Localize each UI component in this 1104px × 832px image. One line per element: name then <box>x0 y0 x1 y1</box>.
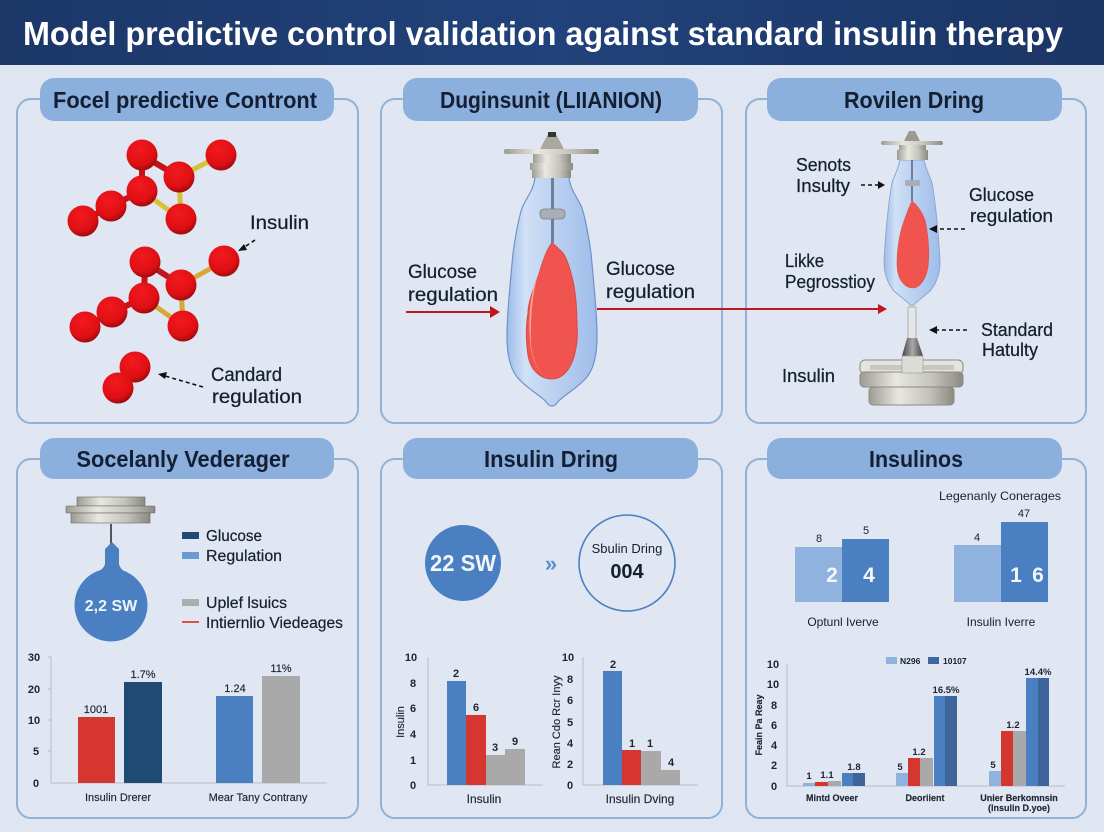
grouped bar chart: Feain Pa Reay <box>754 694 764 756</box>
bar chart: insulin dving: 4 <box>567 738 574 750</box>
big value circle <box>425 525 501 601</box>
bar chart: insulin dreyer: 1.24 <box>224 683 246 695</box>
stacked comparison: optunl iverve: 5 <box>863 525 869 537</box>
icon: middle molecule <box>70 246 240 342</box>
grouped bar chart: (Insulin D.yoe) <box>988 803 1050 813</box>
grouped bar chart: Unier Berkomnsin <box>980 793 1058 803</box>
label: regulation left: regulation <box>408 285 498 306</box>
panel heading <box>403 438 698 479</box>
legend <box>182 528 343 632</box>
label: standard: Standard <box>981 320 1053 340</box>
icon: blue dose drop <box>74 542 148 642</box>
label: glucose: Glucose <box>969 185 1034 205</box>
bar chart: insulin dving: 1 <box>629 738 635 750</box>
bar chart: insulin dreyer: 1001 <box>84 704 108 716</box>
arrow: glucose <box>929 225 965 233</box>
bar chart: insulin: 9 <box>512 736 518 748</box>
panel: flask <box>381 78 722 423</box>
arrow: long flow <box>597 304 887 314</box>
grouped bar chart: 2 <box>771 760 777 772</box>
bar chart: insulin dreyer <box>28 652 327 804</box>
bar chart: insulin dving: 4 <box>668 757 675 769</box>
bar chart: insulin: 0 <box>410 780 416 792</box>
stacked comparison: optunl iverve: 2 <box>826 564 838 587</box>
stacked comparison: optunl iverve <box>795 525 889 629</box>
panel heading <box>40 438 334 479</box>
stacked comparison: optunl iverve: Optunl Iverve <box>807 615 879 629</box>
legend: Uplef lsuics <box>206 595 287 612</box>
stacked comparison: insulin iverre: 1 <box>1010 564 1022 587</box>
bar chart: insulin dving: 2 <box>610 659 616 671</box>
header banner <box>0 0 1104 65</box>
bar chart: insulin dreyer: 5 <box>33 746 39 758</box>
bar chart: insulin: 6 <box>410 703 416 715</box>
panel heading: Insulin Dring <box>484 446 618 472</box>
chart note: Legenanly Conerages <box>939 489 1061 503</box>
grouped bar chart: 5 <box>897 762 903 773</box>
stacked comparison: insulin iverre: 6 <box>1032 564 1044 587</box>
label: insulin: Insulin <box>782 366 835 386</box>
bar chart: insulin dreyer: 10 <box>28 715 40 727</box>
label: pegrosstioy: Pegrosstioy <box>785 272 875 292</box>
grouped bar chart: 5 <box>990 760 996 771</box>
bar chart: insulin dving: 1 <box>647 738 653 750</box>
legend: Glucose <box>206 528 262 545</box>
grouped bar chart: 16.5% <box>933 685 960 696</box>
stacked comparison: insulin iverre <box>954 508 1048 629</box>
chart legend <box>886 656 967 666</box>
bar chart: insulin: 4 <box>410 729 417 741</box>
bar chart: insulin: 2 <box>453 668 459 680</box>
label: regulation: regulation <box>970 206 1053 226</box>
arrow: standard <box>929 326 967 334</box>
grouped bar chart: 8 <box>771 700 777 712</box>
grouped bar chart: 4 <box>771 740 778 752</box>
arrow: senots <box>861 181 885 189</box>
bar chart: insulin dreyer: 20 <box>28 684 40 696</box>
outlined value circle <box>579 515 675 611</box>
bar chart: insulin: Insulin <box>467 792 501 806</box>
grouped bar chart: 1.2 <box>1006 720 1020 731</box>
bar chart: insulin dving <box>551 652 698 806</box>
stacked comparison: insulin iverre: 4 <box>974 532 980 544</box>
bar chart: insulin dreyer: 0 <box>33 778 39 790</box>
grouped bar chart: 1.2 <box>912 747 926 758</box>
bar chart: insulin: Insulin <box>395 706 407 738</box>
label: glucose regulation left: Glucose <box>408 262 477 283</box>
big value circle: 22 SW <box>430 550 496 576</box>
grouped bar chart: Mintd Oveer <box>806 793 858 803</box>
grouped bar chart: 0 <box>771 781 777 793</box>
stacked comparison: optunl iverve: 8 <box>816 533 822 545</box>
chart legend: 10107 <box>943 656 967 666</box>
panel: insulin dring <box>381 438 722 818</box>
bar chart: insulin dving: 6 <box>567 695 573 707</box>
panel heading: Socelanly Vederager <box>76 446 290 472</box>
grouped bar chart: 10 <box>767 679 779 691</box>
label: hatulty: Hatulty <box>982 340 1038 360</box>
bar chart: insulin dving: 8 <box>567 674 573 686</box>
icon: flask with stand <box>860 131 963 405</box>
label: regulation: regulation <box>212 387 302 408</box>
panel heading <box>40 78 334 121</box>
panel: dose and bars <box>17 438 358 818</box>
panel heading <box>767 438 1062 479</box>
icon: upper molecule <box>68 140 236 236</box>
legend: Intiernlio Viedeages <box>206 615 343 632</box>
bar chart: insulin dreyer: 1.7% <box>130 669 156 681</box>
bar chart: insulin dving: Rean Cdo Rcr Inyy <box>551 675 563 768</box>
bar chart: insulin: 8 <box>410 678 416 690</box>
bar chart: insulin dving: Insulin Dving <box>606 792 674 806</box>
panel heading <box>403 78 698 121</box>
chevron: » <box>545 551 557 576</box>
title: Model predictive control validation against standard insulin therapy <box>23 15 1064 52</box>
panel heading: Focel predictive Contront <box>53 87 317 113</box>
bar chart: insulin <box>395 652 543 806</box>
bar chart: insulin dving: 5 <box>567 717 573 729</box>
panel: device <box>597 78 1086 423</box>
bar chart: insulin dreyer: Insulin Drerer <box>85 792 151 804</box>
grouped bar chart: 1.1 <box>820 770 834 781</box>
arrow: candard <box>158 372 203 387</box>
grouped bar chart: 10 <box>767 659 779 671</box>
grouped bar chart <box>754 656 1065 813</box>
grouped bar chart: 1 <box>806 771 812 782</box>
stacked comparison: insulin iverre: 47 <box>1018 508 1030 520</box>
label: insulin: Insulin <box>250 213 309 234</box>
icon: pump head <box>66 497 155 544</box>
label: glucose regulation right: Glucose <box>606 259 675 280</box>
bar chart: insulin dreyer: 30 <box>28 652 40 664</box>
bar chart: insulin: 3 <box>492 742 498 754</box>
bar chart: insulin dving: 2 <box>567 759 573 771</box>
arrow: inflow <box>406 306 500 318</box>
label: senots: Senots <box>796 155 851 175</box>
bar chart: insulin: 10 <box>405 652 417 664</box>
label: candard regulation: Candard <box>211 365 282 386</box>
legend: Regulation <box>206 548 282 565</box>
icon: small molecule <box>102 352 150 404</box>
grouped bar chart: 14.4% <box>1025 667 1052 678</box>
bar chart: insulin dving: 10 <box>562 652 574 664</box>
stacked comparison: optunl iverve: 4 <box>863 564 875 587</box>
bar chart: insulin dreyer: Mear Tany Contrany <box>209 792 308 804</box>
bar chart: insulin dving: 0 <box>567 780 573 792</box>
outlined value circle: Sbulin Dring <box>592 541 662 556</box>
panel: molecule <box>17 78 358 423</box>
label: regulation right: regulation <box>606 282 695 303</box>
panel heading: Rovilen Dring <box>844 87 984 113</box>
bar chart: insulin dreyer: 11% <box>270 663 292 675</box>
panel: insulinos <box>746 438 1086 818</box>
arrow: insulin <box>238 240 255 251</box>
panel heading: Duginsunit (LIIANION) <box>440 87 662 113</box>
grouped bar chart: Deoriient <box>905 793 945 803</box>
label: insulty: Insulty <box>796 176 850 196</box>
chart legend: N296 <box>900 656 921 666</box>
icon: flask <box>504 132 599 406</box>
bar chart: insulin: 6 <box>473 702 479 714</box>
bar chart: insulin: 1 <box>410 755 416 767</box>
icon: blue dose drop: 2,2 SW <box>85 598 138 615</box>
label: likke: Likke <box>785 251 824 271</box>
grouped bar chart: 6 <box>771 720 777 732</box>
grouped bar chart: 1.8 <box>847 762 861 773</box>
panel heading <box>767 78 1062 121</box>
stacked comparison: insulin iverre: Insulin Iverre <box>967 615 1036 629</box>
outlined value circle: 004 <box>610 561 645 583</box>
panel heading: Insulinos <box>869 446 963 472</box>
